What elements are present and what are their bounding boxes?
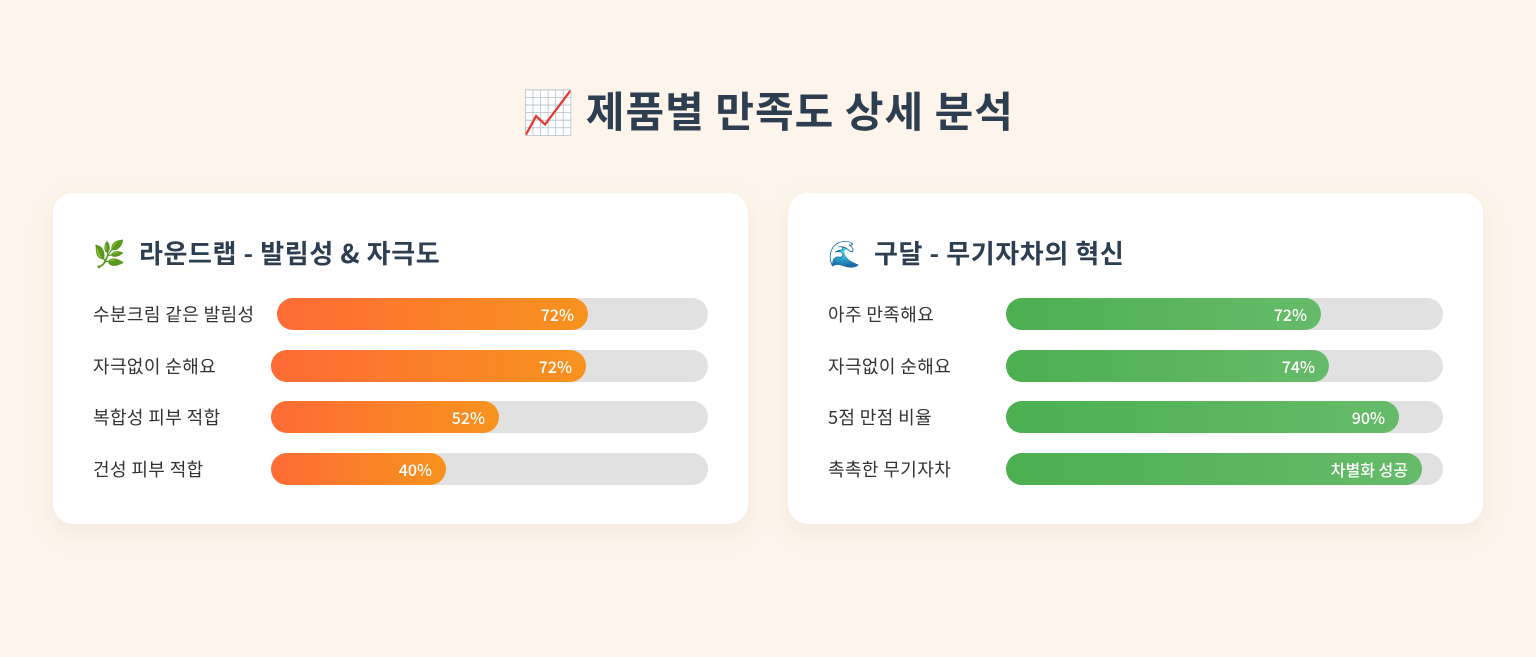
row 4: 차별화 성공 bbox=[1331, 457, 1408, 481]
row 1 bbox=[93, 298, 708, 330]
title: 📈 제품별 만족도 상세 분석 bbox=[522, 79, 1014, 140]
row 1: 72% bbox=[1274, 302, 1307, 326]
row 4: 촉촉한 무기자차 bbox=[828, 456, 951, 482]
panel: right card bbox=[788, 193, 1483, 524]
panel: left card bbox=[53, 193, 748, 524]
heading left: 🌿 라운드랩 - 발림성 & 자극도 bbox=[93, 234, 440, 271]
row 1 bbox=[828, 298, 1443, 330]
row 4 bbox=[93, 453, 708, 485]
heading right: 🌊 구달 - 무기자차의 혁신 bbox=[828, 234, 1124, 271]
row 1: 수분크림 같은 발림성 bbox=[93, 301, 255, 327]
row 1: 아주 만족해요 bbox=[828, 301, 934, 327]
row 4: 40% bbox=[399, 457, 432, 481]
row 3: 5점 만점 비율 bbox=[828, 404, 932, 430]
row 2: 72% bbox=[539, 354, 572, 378]
row 3 bbox=[93, 401, 708, 433]
row 1: 72% bbox=[541, 302, 574, 326]
row 4: 건성 피부 적합 bbox=[93, 456, 204, 482]
row 4 bbox=[828, 453, 1443, 485]
row 3 bbox=[828, 401, 1443, 433]
row 2: 74% bbox=[1282, 354, 1315, 378]
row 2: 자극없이 순해요 bbox=[828, 353, 951, 379]
row 2 bbox=[93, 350, 708, 382]
row 3: 복합성 피부 적합 bbox=[93, 404, 221, 430]
row 3: 52% bbox=[452, 405, 485, 429]
row 3: 90% bbox=[1352, 405, 1385, 429]
row 2: 자극없이 순해요 bbox=[93, 353, 216, 379]
row 2 bbox=[828, 350, 1443, 382]
